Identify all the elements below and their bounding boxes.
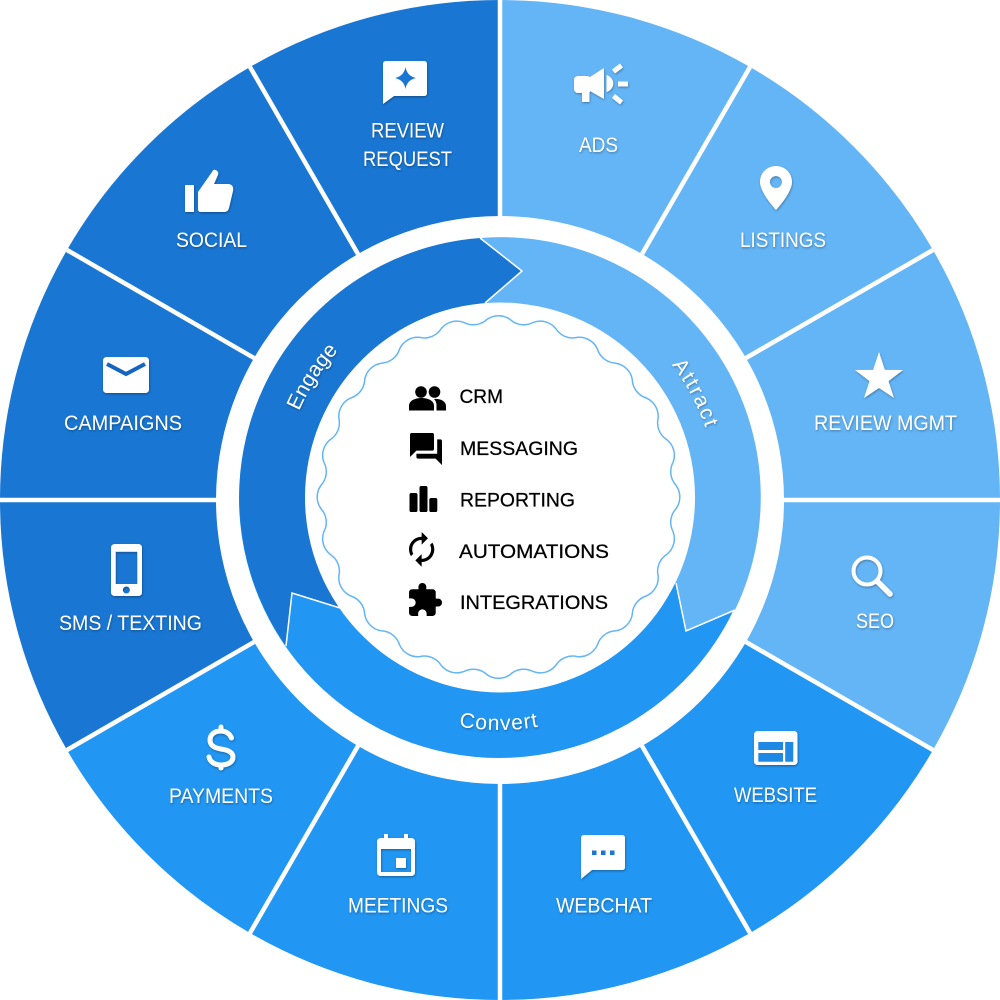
segment: website	[500, 500, 933, 933]
segment: webchat	[500, 500, 750, 1000]
label: PAYMENTS: PAYMENTS	[169, 785, 273, 808]
label: AUTOMATIONS: AUTOMATIONS	[459, 541, 609, 563]
label: LISTINGS: LISTINGS	[740, 229, 826, 252]
label: REPORTING: REPORTING	[460, 490, 575, 512]
icon: chat bubble	[581, 835, 625, 879]
icon: puzzle piece	[409, 583, 442, 616]
label: WEBSITE: WEBSITE	[734, 784, 817, 807]
stage: convert	[239, 238, 759, 758]
icon: location pin	[760, 166, 792, 210]
label: Engage: Engage	[286, 346, 338, 412]
icon: browser window	[754, 731, 798, 765]
icon: star	[855, 352, 903, 398]
icon: dollar sign	[209, 727, 233, 768]
label: Convert: Convert	[460, 713, 540, 732]
panel: inner funnel ring	[239, 237, 761, 758]
segment: payments	[67, 500, 500, 933]
icon: smartphone	[111, 544, 142, 596]
label: SEO: SEO	[856, 610, 894, 633]
label: SOCIAL: SOCIAL	[176, 229, 247, 252]
panel: centre hub	[305, 302, 695, 692]
segment: meetings	[250, 500, 500, 1000]
icon: calendar	[377, 834, 415, 876]
icon: thumbs up	[185, 170, 233, 212]
segment: listings	[500, 67, 933, 500]
label: SMS / TEXTING: SMS / TEXTING	[59, 612, 202, 635]
segment: social	[67, 67, 500, 500]
icon: messages	[410, 433, 442, 465]
label: MESSAGING: MESSAGING	[460, 438, 578, 460]
icon: review bubble	[383, 61, 427, 104]
icon: sync arrows	[409, 532, 434, 567]
segment: review management	[500, 250, 1000, 500]
stage: engage	[239, 238, 522, 646]
icon: megaphone	[574, 64, 628, 104]
label: CAMPAIGNS: CAMPAIGNS	[64, 412, 182, 435]
icon: magnifier	[854, 558, 890, 594]
label: ADS: ADS	[579, 134, 618, 157]
segment: ads	[500, 0, 750, 500]
label: Attract: Attract	[672, 361, 718, 430]
segment: review request	[250, 0, 500, 500]
segment: sms texting	[0, 500, 500, 750]
wavy border	[317, 316, 680, 678]
icon: bar chart	[410, 486, 437, 512]
label: INTEGRATIONS: INTEGRATIONS	[460, 592, 608, 614]
segment: seo	[500, 500, 1000, 750]
label: REVIEW REQUEST: REVIEW	[371, 120, 444, 142]
stage: attract	[480, 237, 761, 631]
label: MEETINGS: MEETINGS	[348, 894, 448, 918]
label: REVIEW REQUEST: REQUEST	[363, 148, 452, 171]
label: WEBCHAT: WEBCHAT	[556, 894, 652, 918]
icon: people	[409, 386, 446, 410]
label: CRM: CRM	[460, 386, 503, 408]
hub disc	[305, 302, 695, 692]
icon: envelope	[103, 357, 149, 393]
label: REVIEW MGMT: REVIEW MGMT	[814, 412, 957, 435]
segment: campaigns	[0, 250, 500, 500]
